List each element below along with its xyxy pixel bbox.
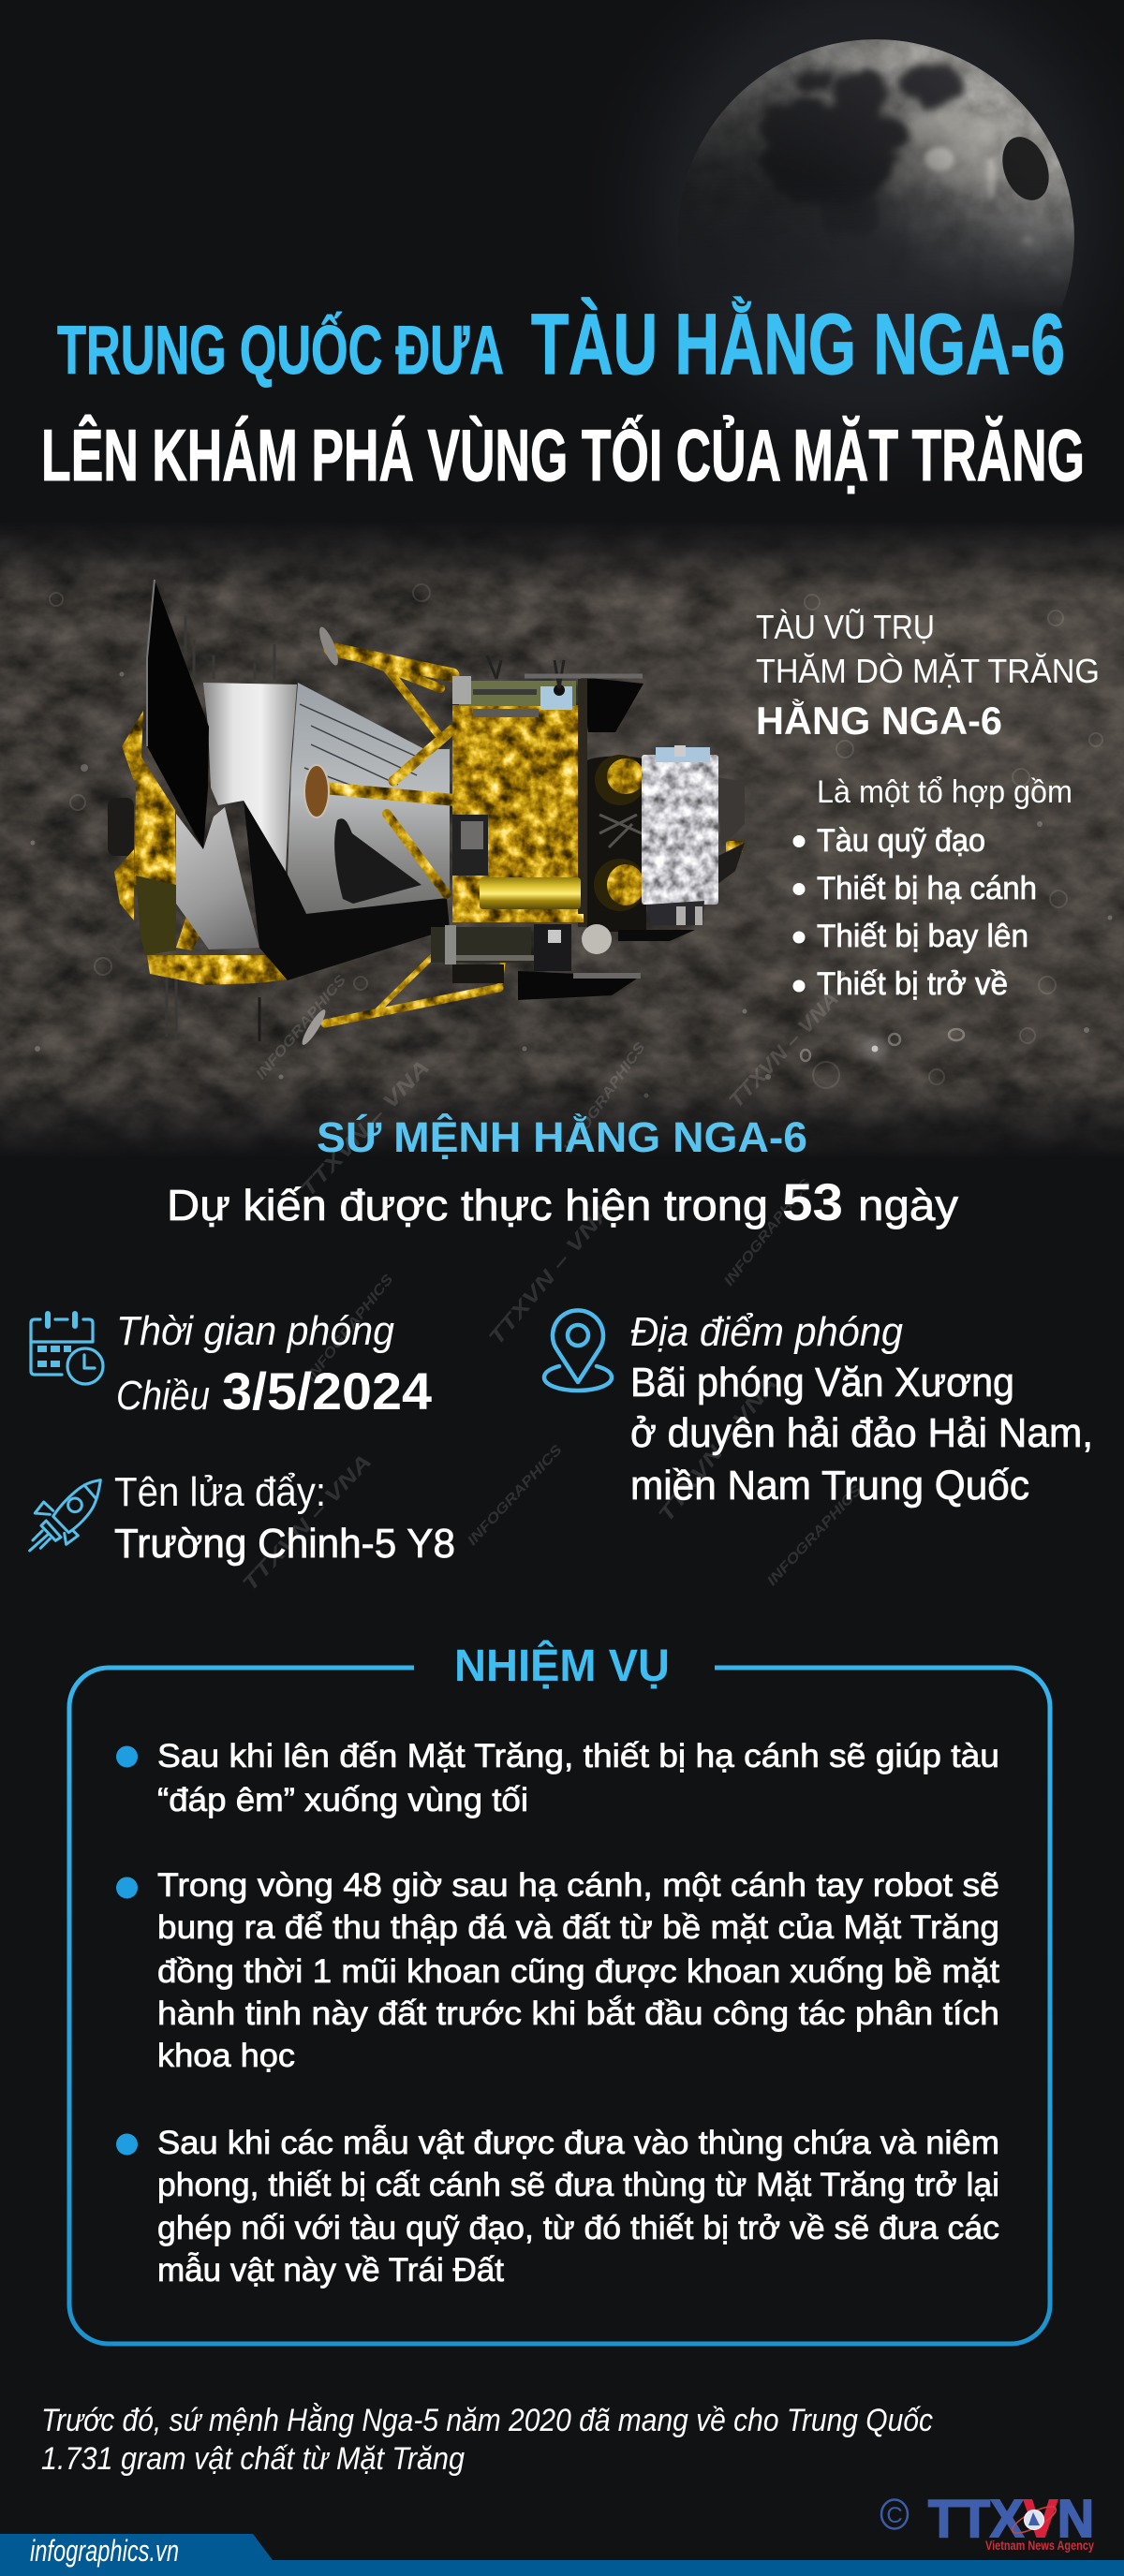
launch site text bbox=[630, 1309, 1093, 1509]
launch time text: Thời gian phóng bbox=[116, 1308, 394, 1354]
watermarks: TTXVN – VNA bbox=[238, 1450, 376, 1596]
sphere bases bbox=[595, 755, 645, 805]
task 2: hành tinh này đất trước khi bắt đầu công tác phân tích bbox=[157, 1995, 999, 2032]
closing note: Trước đó, sứ mệnh Hằng Nga-5 năm 2020 đã mang về cho Trung Quốc bbox=[41, 2403, 933, 2438]
silver collar bbox=[203, 683, 297, 872]
lower sampler and panel bbox=[534, 924, 571, 971]
panel: tasks bbox=[69, 1640, 1050, 2344]
rocket name text: Trường Chinh-5 Y8 bbox=[114, 1521, 455, 1567]
TTXVN logo: Vietnam News Agency bbox=[985, 2538, 1094, 2553]
dark equipment bay bbox=[587, 757, 646, 932]
mission heading bbox=[167, 1113, 958, 1231]
solar panel bbox=[147, 580, 209, 849]
watermarks: INFOGRAPHICS bbox=[764, 1482, 865, 1589]
watermarks: INFOGRAPHICS bbox=[465, 1442, 566, 1549]
lower-left equipment bbox=[452, 815, 488, 876]
spacecraft heading: THĂM DÒ MẶT TRĂNG bbox=[756, 652, 1100, 690]
launch time text: 3/5/2024 bbox=[222, 1362, 432, 1420]
spacecraft illustration bbox=[108, 580, 745, 1047]
task 3: Sau khi các mẫu vật được đưa vào thùng chứa và niêm bbox=[157, 2125, 999, 2161]
antennas bbox=[167, 615, 274, 1041]
footer bar: infographics.vn bbox=[30, 2534, 179, 2568]
task 1: Sau khi lên đến Mặt Trăng, thiết bị hạ cánh sẽ giúp tàu bbox=[157, 1738, 999, 1774]
gold box and arms bbox=[318, 649, 578, 1023]
right bay details bbox=[717, 777, 745, 847]
component list: Là một tổ hợp gồm bbox=[817, 774, 1072, 810]
mission heading: 53 bbox=[782, 1172, 843, 1231]
task 3: mẫu vật này về Trái Đất bbox=[157, 2252, 504, 2289]
mission heading: ngày bbox=[858, 1181, 958, 1229]
panel border bbox=[69, 1668, 1050, 2344]
component list: Thiết bị trở về bbox=[817, 966, 1008, 1002]
launch site text: ở duyên hải đảo Hải Nam, bbox=[630, 1410, 1093, 1456]
task 1 bbox=[116, 1738, 999, 1818]
watermarks: TTXVN – VNA bbox=[654, 1372, 781, 1526]
rear thruster bbox=[108, 798, 134, 856]
watermarks: INFOGRAPHICS bbox=[560, 1039, 648, 1156]
spacecraft heading: HẰNG NGA-6 bbox=[756, 699, 1002, 743]
panel heading: NHIỆM VỤ bbox=[454, 1640, 670, 1691]
task 2: Trong vòng 48 giờ sau hạ cánh, một cánh tay robot sẽ bbox=[157, 1867, 999, 1904]
launch site text: Địa điểm phóng bbox=[630, 1309, 903, 1355]
component list bbox=[792, 774, 1072, 1002]
footer bar bbox=[0, 2534, 1124, 2576]
instrument deck bbox=[459, 681, 576, 706]
task 3: ghép nối với tàu quỹ đạo, từ đó thiết bị trở về sẽ đưa các bbox=[157, 2210, 999, 2246]
lower silver body bbox=[176, 807, 259, 949]
task 1: “đáp êm” xuống vùng tối bbox=[157, 1782, 528, 1818]
moon illustration bbox=[652, 0, 1101, 431]
rocket name text bbox=[114, 1469, 455, 1567]
component list: Tàu quỹ đạo bbox=[817, 823, 985, 859]
mission heading: Dự kiến được thực hiện trong bbox=[167, 1181, 768, 1229]
watermarks: INFOGRAPHICS bbox=[303, 1272, 396, 1385]
spacecraft heading bbox=[756, 608, 1100, 743]
title bbox=[41, 296, 1085, 496]
icon: calendar with clock bbox=[31, 1314, 103, 1384]
watermarks bbox=[238, 972, 865, 1596]
launch site text: Bãi phóng Văn Xương bbox=[630, 1360, 1014, 1406]
black shadow bbox=[244, 801, 450, 980]
task 2: đồng thời 1 mũi khoan cũng được khoan xuống bề mặt bbox=[157, 1953, 999, 1990]
task 3: phong, thiết bị cất cánh sẽ đưa thùng từ Mặt Trăng trở lại bbox=[157, 2167, 999, 2203]
launch time text bbox=[116, 1308, 432, 1420]
launch site text: miền Nam Trung Quốc bbox=[630, 1463, 1029, 1509]
closing note: 1.731 gram vật chất từ Mặt Trăng bbox=[41, 2441, 465, 2477]
lunar surface photo backdrop bbox=[0, 515, 1124, 1170]
watermarks: INFOGRAPHICS bbox=[721, 1176, 814, 1289]
component list: Thiết bị hạ cánh bbox=[817, 871, 1037, 906]
silver module bbox=[642, 755, 718, 905]
watermarks: TTXVN – VNA bbox=[724, 987, 843, 1112]
rear gold insulation bbox=[114, 711, 288, 985]
bright crater glow bbox=[862, 1036, 888, 1062]
task 2 bbox=[116, 1867, 999, 2074]
spacecraft heading: TÀU VŨ TRỤ bbox=[756, 608, 935, 646]
dark gold lower bbox=[136, 876, 176, 955]
TTXVN logo: TTXVN bbox=[928, 2489, 1094, 2549]
cone body bbox=[288, 683, 450, 914]
footpads bbox=[316, 625, 342, 668]
round fitting bbox=[304, 765, 329, 817]
launch time text: Chiều bbox=[116, 1373, 210, 1419]
task 2: khoa học bbox=[157, 2038, 295, 2074]
watermarks: TTXVN – VNA bbox=[484, 1198, 616, 1349]
component list: Thiết bị bay lên bbox=[817, 919, 1028, 954]
gold cylinder bbox=[480, 877, 581, 909]
side strip bbox=[578, 679, 587, 927]
rocket name text: Tên lửa đẩy: bbox=[114, 1469, 326, 1515]
closing note bbox=[41, 2403, 933, 2477]
gold sphere highlights bbox=[452, 758, 743, 922]
cone shadow bbox=[334, 818, 422, 904]
top black panel bbox=[581, 677, 643, 732]
task 3 bbox=[116, 2125, 999, 2289]
mission heading: SỨ MỆNH HẰNG NGA-6 bbox=[317, 1113, 807, 1161]
watermarks: INFOGRAPHICS bbox=[253, 972, 349, 1082]
title: TRUNG QUỐC ĐƯA bbox=[57, 312, 504, 389]
TTXVN logo: C bbox=[886, 2503, 903, 2528]
icon: rocket bbox=[30, 1480, 100, 1551]
watermarks: TTXVN – VNA bbox=[296, 1055, 434, 1201]
icon: location pin bbox=[544, 1310, 612, 1391]
task 2: bung ra để thu thập đá và đất từ bề mặt của Mặt Trăng bbox=[157, 1909, 999, 1946]
